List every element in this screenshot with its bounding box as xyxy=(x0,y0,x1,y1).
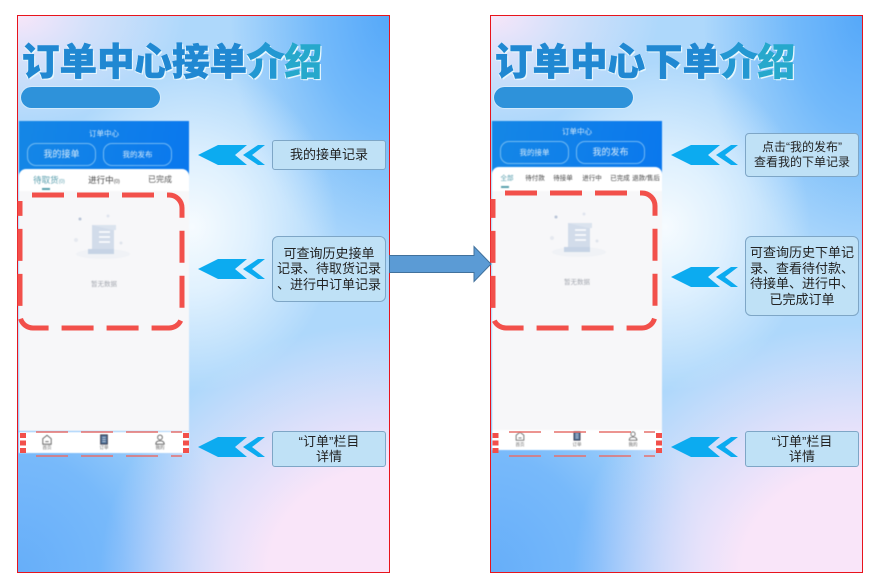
tab: in progress: 进行中(0) xyxy=(88,175,120,185)
nav: orders xyxy=(572,430,582,442)
empty state text: 暂无数据 xyxy=(91,281,117,288)
arrow: to nav note xyxy=(671,437,738,457)
app header xyxy=(492,121,662,179)
button: my received orders: 我的接单 xyxy=(43,149,80,159)
button: my published orders: 我的发布 xyxy=(122,150,152,159)
dashed highlight: bottom navigation xyxy=(20,431,189,457)
tab: in progress: 进行中 xyxy=(582,175,602,182)
button: my published orders: 我的发布 xyxy=(592,147,628,157)
arrow: to my published note xyxy=(671,145,738,165)
arrow: to history note xyxy=(198,259,265,279)
callout: view my placed orders xyxy=(745,133,859,177)
callout: view my placed orders: 点击“我的发布” xyxy=(762,140,842,154)
tab: completed: 已完成 xyxy=(610,175,630,182)
tab: pending acceptance: 待接单 xyxy=(553,175,573,182)
arrow: to nav note xyxy=(198,437,265,457)
callout: history orders xyxy=(745,236,859,316)
nav: home xyxy=(42,434,52,446)
active tab underline xyxy=(42,188,50,190)
nav label: profile: 我的 xyxy=(156,445,164,450)
nav: home xyxy=(515,431,525,442)
nav: orders xyxy=(99,434,109,446)
tab: pending payment: 待付款 xyxy=(525,175,545,182)
decorative subtitle pill xyxy=(21,87,160,108)
callout: my received records xyxy=(272,140,386,170)
phone screenshot: my published orders xyxy=(491,120,663,451)
callout: history records: 记录、待取货记录 xyxy=(277,261,381,276)
empty state body xyxy=(492,191,662,430)
callout: history orders: 录、查看待付款、 xyxy=(750,260,854,276)
nav label: orders: 订单 xyxy=(572,442,582,447)
callout: my received records: 我的接单记录 xyxy=(290,147,368,162)
nav label: home: 首页 xyxy=(42,445,52,450)
app header xyxy=(19,121,189,179)
nav label: home: 首页 xyxy=(516,442,524,447)
callout: history orders: 待接单、进行中、 xyxy=(750,276,854,291)
nav: profile xyxy=(628,430,638,442)
nav: profile xyxy=(154,434,166,446)
dashed highlight: list area xyxy=(18,192,184,330)
callout: history orders: 可查询历史下单记 xyxy=(750,245,854,260)
callout: order tab details: 详情 xyxy=(789,449,815,464)
callout: order tab details xyxy=(745,431,859,467)
callout: history orders: 已完成订单 xyxy=(769,292,834,306)
tab: refund and after-sales: 退款/售后 xyxy=(632,175,660,182)
arrow: between panels xyxy=(389,245,492,283)
callout: history records: 、进行中订单记录 xyxy=(277,277,381,292)
dashed highlight: bottom navigation xyxy=(492,431,662,457)
arrow: to history note xyxy=(671,267,738,287)
button: my received orders xyxy=(500,141,569,164)
panel: order placing introduction xyxy=(490,15,863,573)
arrow: to my orders note xyxy=(198,145,265,165)
callout: order tab details: “订单”栏目 xyxy=(299,434,359,448)
tab: all: 全部 xyxy=(500,175,514,182)
empty state body xyxy=(19,191,189,431)
phone screenshot: my received orders xyxy=(18,120,190,454)
header title: 订单中心 xyxy=(562,127,592,136)
button: my published orders xyxy=(576,141,645,164)
panel: order receiving introduction xyxy=(17,15,390,573)
decorative subtitle pill xyxy=(494,87,633,108)
header title: 订单中心 xyxy=(89,129,119,138)
empty state icon xyxy=(74,214,122,255)
button: my published orders xyxy=(103,143,172,166)
callout: history records: 可查询历史接单 xyxy=(283,246,374,261)
nav label: profile: 我的 xyxy=(628,442,638,447)
dashed highlight: list area xyxy=(490,190,658,330)
tabs card xyxy=(19,169,189,191)
empty state text: 暂无数据 xyxy=(564,279,590,286)
callout: order tab details: 详情 xyxy=(316,449,342,464)
title: placing: 订单中心下单介绍 xyxy=(495,41,795,83)
callout: history records xyxy=(272,236,386,302)
tab: completed: 已完成 xyxy=(148,175,172,184)
title: receiving: 订单中心接单介绍 xyxy=(22,41,322,83)
button: my received orders: 我的接单 xyxy=(520,148,550,157)
nav label: orders: 订单 xyxy=(100,445,108,450)
callout: order tab details xyxy=(272,431,386,467)
bottom navigation xyxy=(492,430,662,450)
bottom navigation xyxy=(19,432,189,453)
callout: view my placed orders: 查看我的下单记录 xyxy=(754,155,850,169)
tab: to pick up: 待取货(0) xyxy=(33,175,65,185)
callout: order tab details: “订单”栏目 xyxy=(772,434,832,448)
tabs card xyxy=(492,167,662,191)
active tab underline xyxy=(501,186,509,188)
button: my received orders xyxy=(27,143,96,166)
empty state icon xyxy=(550,212,598,253)
